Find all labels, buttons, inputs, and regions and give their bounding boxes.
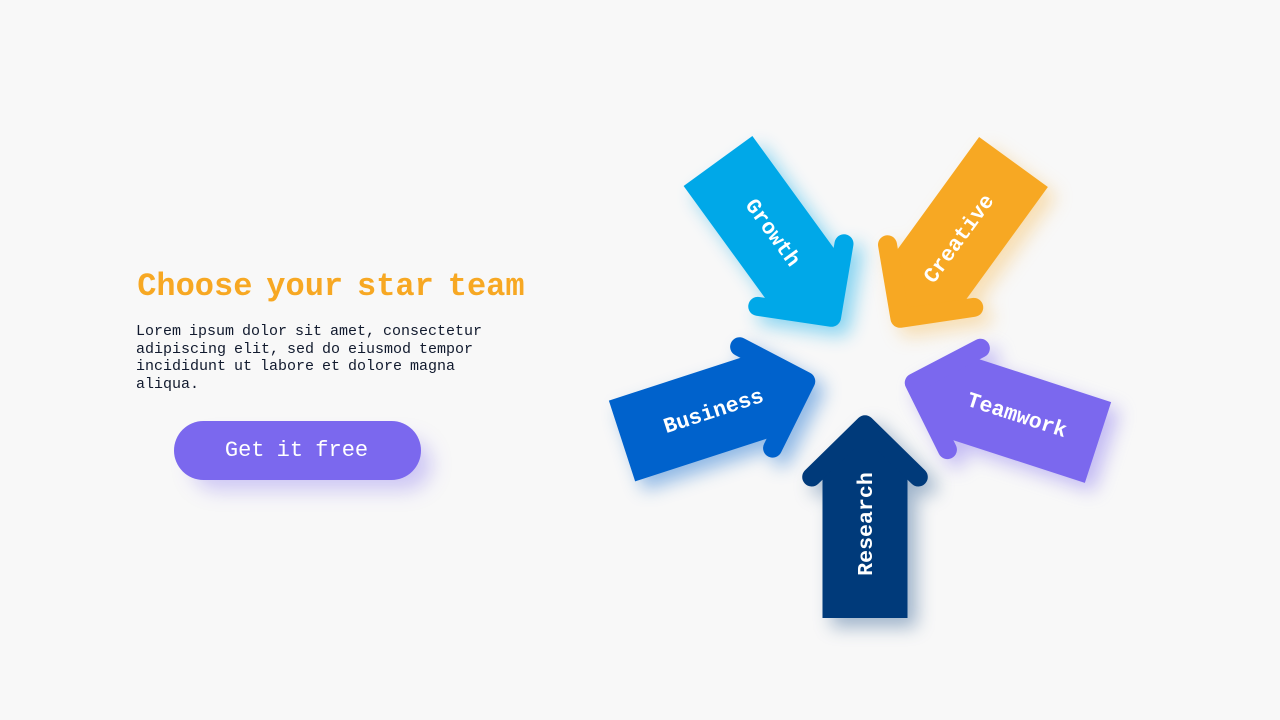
arrow: research: [812, 425, 918, 618]
label: teamwork: Teamwork: [963, 389, 1070, 444]
arrow: teamwork: [898, 332, 1114, 493]
label: growth: Growth: [739, 195, 804, 272]
label: creative: Creative: [920, 191, 1000, 288]
button: get it free: Get it free: [225, 438, 368, 463]
arrow: business: [606, 331, 822, 492]
label: business: Business: [661, 385, 767, 440]
title: Choose your star team: [137, 268, 525, 305]
label: research: Research: [855, 472, 879, 576]
arrow: creative: [857, 131, 1057, 350]
button: get it free: [174, 421, 421, 480]
arrow: growth: [675, 130, 875, 349]
body text: Lorem ipsum dolor sit amet, consectetur adipiscing elit, sed do eiusmod tempor incididunt ut labore et dolore magna aliqua.: [136, 323, 482, 392]
